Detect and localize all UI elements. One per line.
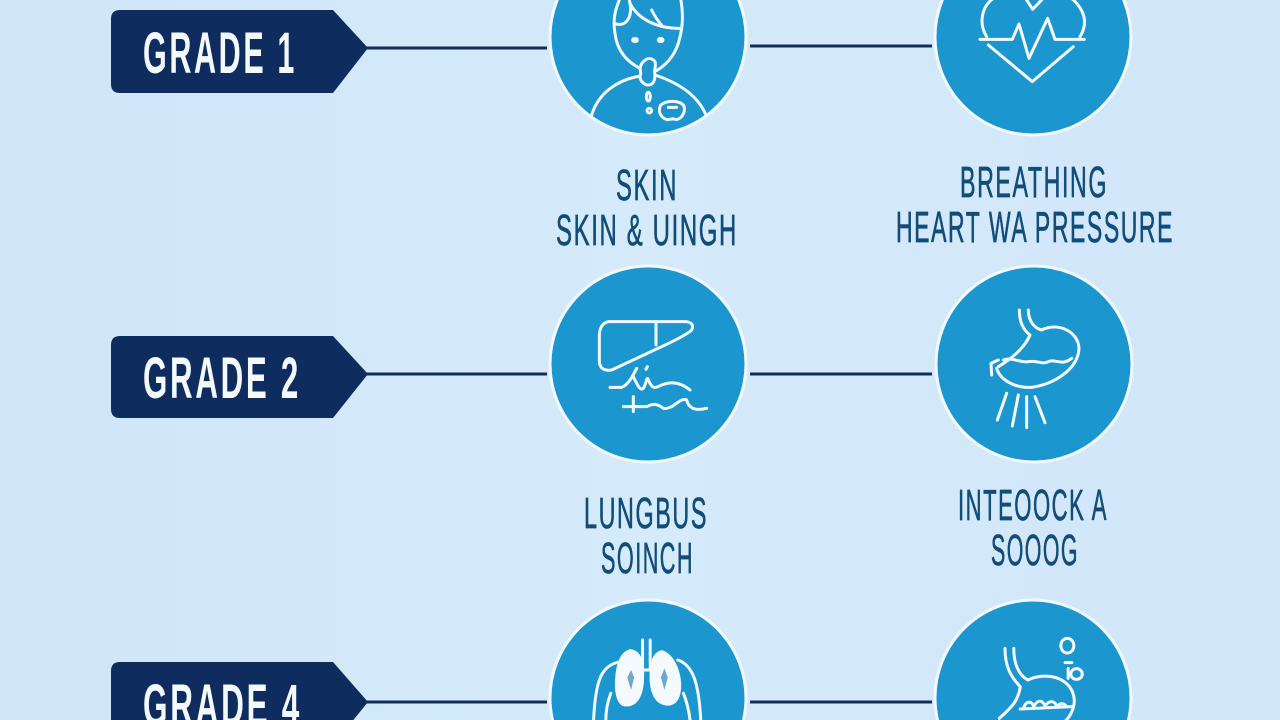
connector: liver circle to stomach circle: [750, 372, 932, 376]
label: lungs: [584, 489, 708, 583]
connector: badge to skin circle: [366, 46, 547, 50]
label: intestine: INTEOOCK A: [958, 481, 1108, 530]
row: grade 4: [111, 600, 1131, 720]
label: breathing: BREATHING: [960, 158, 1108, 207]
icon: lungs: [550, 600, 746, 720]
badge: grade 2: [111, 336, 368, 418]
label: intestine: [958, 481, 1108, 575]
icon: heart with pulse: [935, 0, 1131, 135]
connector: badge to liver circle: [366, 372, 547, 376]
badge: grade 2: GRADE 2: [143, 346, 301, 411]
label: lungs: SOINCH: [601, 534, 694, 583]
icon: liver: [550, 266, 746, 462]
label: lungs: LUNGBUS: [584, 489, 708, 538]
label: breathing: [896, 158, 1174, 252]
label: intestine: SOOOG: [991, 526, 1079, 575]
badge: grade 4: [111, 662, 368, 720]
connector: badge to lungs circle: [366, 700, 547, 704]
badge: grade 1: GRADE 1: [143, 21, 297, 86]
label: skin: [556, 161, 738, 255]
icon: stomach with rays: [936, 266, 1132, 462]
row: grade 1: [111, 0, 1131, 135]
label: skin: SKIN: [616, 161, 678, 210]
row: grade 2: [111, 266, 1132, 462]
badge: grade 1: [111, 10, 368, 93]
label: skin: SKIN & UINGH: [556, 206, 738, 255]
connector: lungs circle to stomach circle: [750, 700, 932, 704]
icon: person with medal: [550, 0, 746, 135]
icon: stomach with bubbles: [935, 600, 1131, 720]
connector: skin circle to heart circle: [750, 44, 932, 48]
